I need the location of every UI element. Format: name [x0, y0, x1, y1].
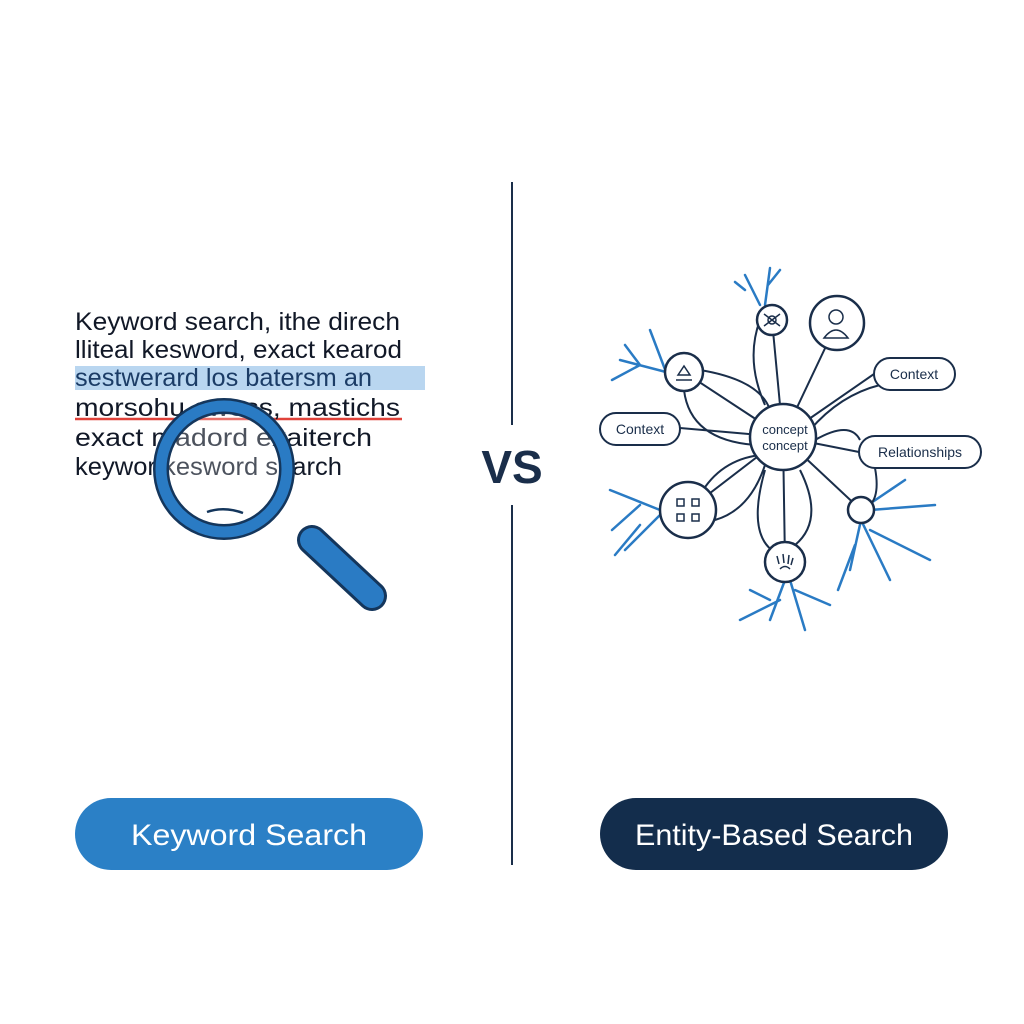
keyword text block: Keyword search, ithe direch — [75, 308, 400, 336]
pill: context right — [874, 358, 955, 390]
keyword text block: exact madord exaiterch — [75, 424, 372, 452]
divider line — [511, 182, 513, 865]
keyword text block — [75, 308, 425, 481]
keyword text block: sestwerard los batersm an — [75, 364, 372, 392]
button: entity-based search: Entity-Based Search — [635, 819, 913, 852]
pill: context left — [600, 413, 680, 445]
button: keyword search — [75, 798, 423, 870]
center concept node — [750, 404, 816, 470]
pill: context left: Context — [616, 421, 664, 437]
connection lines — [680, 320, 880, 562]
icon: magnifying glass — [161, 406, 372, 596]
entity network — [600, 268, 981, 630]
pill: relationships — [859, 436, 981, 468]
button: entity-based search — [600, 798, 948, 870]
pill: context right: Context — [890, 366, 938, 382]
vs label: VS — [481, 441, 543, 493]
center concept node: concept — [762, 422, 808, 437]
node glyphs — [676, 310, 848, 569]
keyword text block: morsohu ewess, mastichs — [75, 394, 400, 422]
keyword text block: keywor kesword search — [75, 453, 342, 481]
icon nodes — [660, 296, 874, 582]
button: keyword search: Keyword Search — [131, 819, 367, 852]
center concept node: concept — [762, 438, 808, 453]
keyword text block: lliteal kesword, exact kearod — [75, 336, 402, 364]
blue branches — [610, 268, 935, 630]
pill: relationships: Relationships — [878, 444, 962, 460]
